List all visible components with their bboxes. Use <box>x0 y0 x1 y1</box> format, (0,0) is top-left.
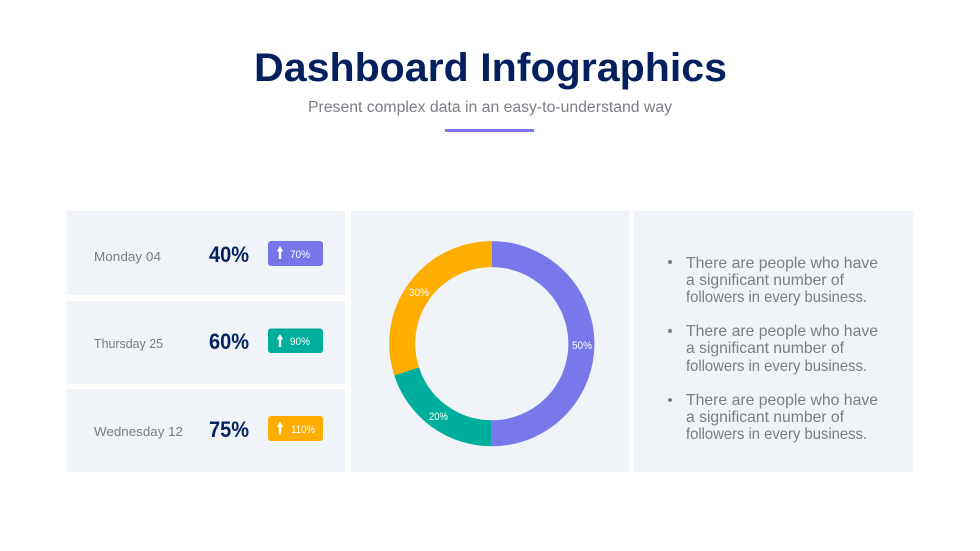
panel: Thursday 25 row <box>67 301 345 384</box>
title: Dashboard Infographics <box>254 46 727 90</box>
value: 40%: 40% <box>209 242 249 267</box>
icon: up arrow <box>277 422 283 434</box>
panel: Wednesday 12 row <box>67 389 345 472</box>
badge text: 70% <box>290 249 310 261</box>
bullet item 3: a significant number of <box>686 409 845 426</box>
donut segment: purple 50% <box>492 254 581 433</box>
badge: up 110% <box>268 416 323 441</box>
label: Monday 04: Monday 04 <box>94 249 161 264</box>
label: 30%: 30% <box>409 287 429 299</box>
title accent bar <box>445 129 534 132</box>
bullet item 2 <box>668 323 878 375</box>
subtitle: Present complex data in an easy-to-understand way <box>308 99 672 116</box>
bullet item 1: a significant number of <box>686 272 845 289</box>
donut segment: orange 30% <box>402 254 492 371</box>
bullet item 1: followers in every business. <box>686 289 867 306</box>
bullet item 3: followers in every business. <box>686 426 867 443</box>
label: Wednesday 12: Wednesday 12 <box>94 424 183 439</box>
panel: bullet text <box>634 211 913 472</box>
donut segment: teal 20% <box>407 371 492 433</box>
bullet item 2: There are people who have <box>686 323 878 340</box>
icon: up arrow <box>277 334 283 347</box>
label: 20%: 20% <box>429 411 448 423</box>
bullet item 1 <box>668 255 878 306</box>
badge: up 70% <box>268 241 323 266</box>
bullet item 2: followers in every business. <box>686 358 867 375</box>
badge text: 110% <box>291 424 315 436</box>
bullet item 3 <box>668 392 878 443</box>
panel: Monday 04 row <box>67 211 345 295</box>
bullet item 1: There are people who have <box>686 255 878 272</box>
value: 60%: 60% <box>209 329 249 354</box>
badge: up 90% <box>268 328 323 353</box>
label: Thursday 25: Thursday 25 <box>94 336 163 351</box>
label: 50%: 50% <box>572 340 592 352</box>
icon: up arrow <box>277 246 283 259</box>
value: 75%: 75% <box>209 417 249 442</box>
bullet item 2: a significant number of <box>686 340 845 357</box>
panel: donut chart <box>351 211 629 472</box>
badge text: 90% <box>290 336 310 348</box>
bullet item 3: There are people who have <box>686 392 878 409</box>
